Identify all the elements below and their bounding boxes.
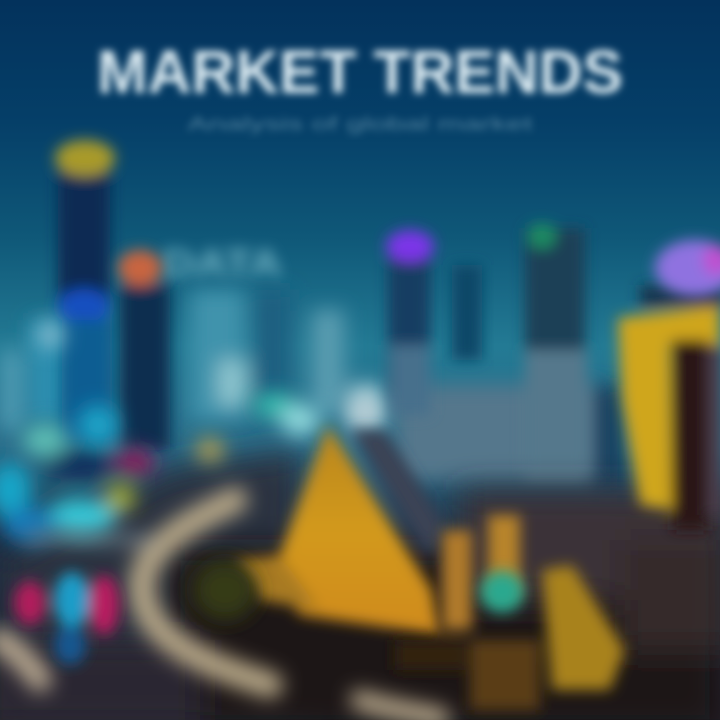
green shrubs on ground — [193, 560, 257, 620]
cyan and magenta lights on left — [0, 321, 381, 543]
grey central building block — [395, 385, 624, 495]
coloured street lights lower left — [14, 572, 119, 665]
yellow domed building on right — [618, 285, 720, 530]
dark ground base — [0, 490, 720, 720]
dark blue ground behind the road — [0, 450, 300, 720]
golden pyramid — [235, 425, 445, 635]
tower with orange top — [118, 250, 170, 450]
title: MARKET TRENDS — [97, 38, 623, 106]
curved road lights — [0, 500, 440, 718]
mid-distance pale towers — [0, 290, 382, 430]
glowing label above skyline: DATA — [162, 243, 282, 285]
golden buildings right of pyramid — [395, 515, 625, 710]
tall tower with yellow top — [55, 140, 115, 440]
tower with purple top — [386, 230, 434, 415]
teal light on gold building — [480, 571, 524, 613]
subtitle: Analysis of global market — [188, 114, 532, 134]
narrow dark tower — [452, 265, 482, 360]
purple dome — [655, 240, 720, 296]
tower with green top — [525, 223, 587, 480]
